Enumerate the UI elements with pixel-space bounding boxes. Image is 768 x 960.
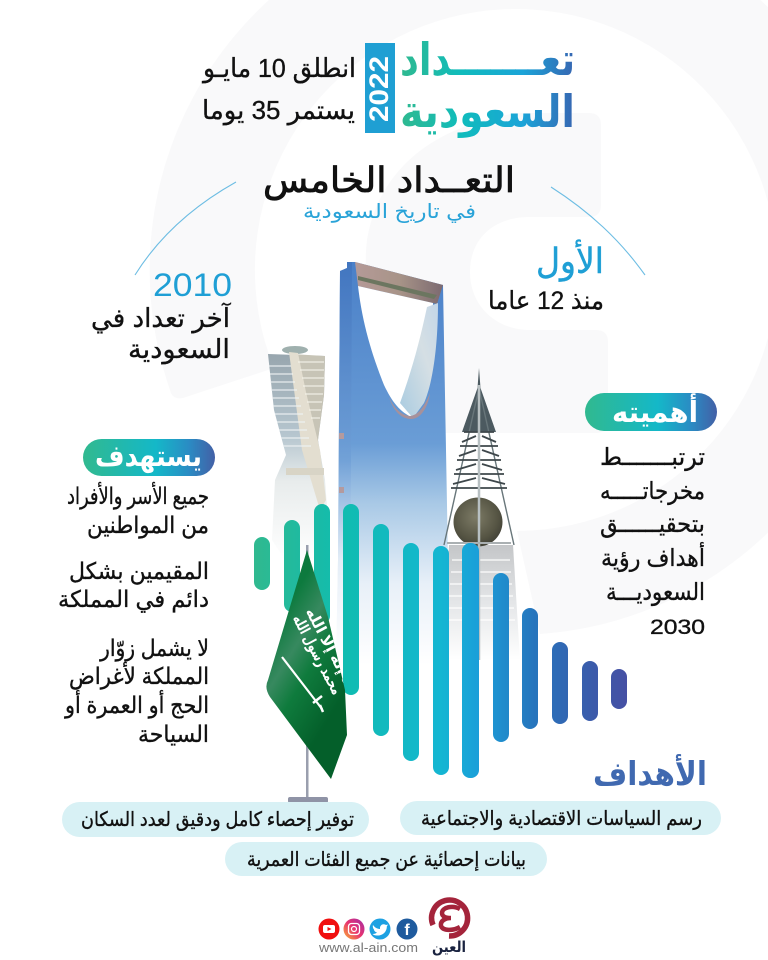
text block: importance: ترتبـــــــط [600,444,705,471]
pill: أهميته: أهميته [612,393,698,429]
dates text [201,53,356,126]
badge: 2022: 2022 [364,56,394,122]
header: title تعداد السعودية: السعودية [400,86,575,138]
dates text: يستمر 35 يوما [202,95,355,126]
text block: target groups: المملكة لأغراض [69,662,209,690]
callout: 2010: آخر تعداد في [91,302,232,334]
goal pill: census count [62,802,369,837]
header: title تعداد السعودية: تعـــــــداد [400,34,575,85]
goal pill: policies [400,801,721,835]
goal pill: age groups [225,842,547,876]
icon: Twitter [370,918,390,940]
callout: 2010: السعودية [128,334,230,365]
heading: التعداد الخامس [263,161,515,224]
website address: www.al-ain.com [318,940,418,955]
text block: importance: 2030 [650,616,705,639]
landmark: Kingdom Centre tower [336,262,449,665]
text block: target groups [58,482,209,747]
heading: التعداد الخامس: في تاريخ السعودية [303,201,476,224]
landmark: Rafal twist tower [268,346,328,560]
text block: target groups: المقيمين بشكل [69,558,209,585]
goal pill: policies: رسم السياسات الاقتصادية والاجتماعية [421,808,702,830]
callout: الأول: منذ 12 عاما [488,287,604,315]
text block: importance [600,444,705,639]
text block: target groups: جميع الأسر والأفراد [67,482,209,510]
badge: 2022 [364,43,395,133]
text block: importance: بتحقيــــــق [600,511,705,538]
background logo watermark [150,0,768,634]
logo: Al-Ain [432,900,468,956]
callout: 2010: 2010 [153,267,232,303]
logo: Al-Ain: العين [432,939,466,956]
Saudi flag: لا إله إلا الله [302,605,358,691]
dates text: انطلق 10 مايـو [201,53,356,84]
heading: الأهداف: الأهداف [593,753,707,792]
Saudi flag: محمد رسول الله [289,612,345,698]
text block: importance: السعوديـــة [606,579,705,606]
icon: Facebook: f [404,922,410,939]
goal pill: census count: توفير إحصاء كامل ودقيق لعدد السكان [81,809,354,832]
header: title تعداد السعودية [400,34,575,138]
goal pill: age groups: بيانات إحصائية عن جميع الفئات العمرية [247,849,526,872]
icon: Facebook [396,918,418,940]
text block: importance: مخرجاتـــــه [600,478,705,505]
text block: target groups: من المواطنين [87,512,209,539]
text block: importance: أهداف رؤية [601,542,705,572]
text block: target groups: الحج أو العمرة أو [64,690,209,719]
callout: 2010 [91,267,232,365]
icon: YouTube [318,918,340,940]
text block: target groups: لا يشمل زوّار [99,635,209,662]
callout: الأول: الأول [536,239,604,282]
landmark: Al Faisaliah tower [442,368,520,660]
Saudi flag [266,545,347,802]
callout: الأول [488,239,604,315]
icon: Instagram [344,918,364,940]
decorative arcs [135,182,645,275]
bar chart [254,504,627,778]
pill: أهميته [585,393,717,431]
text block: target groups: السياحة [138,721,209,747]
text block: target groups: دائم في المملكة [58,586,209,613]
heading: التعداد الخامس: التعــداد الخامس [263,161,515,200]
pill: يستهدف: يستهدف [95,441,202,473]
